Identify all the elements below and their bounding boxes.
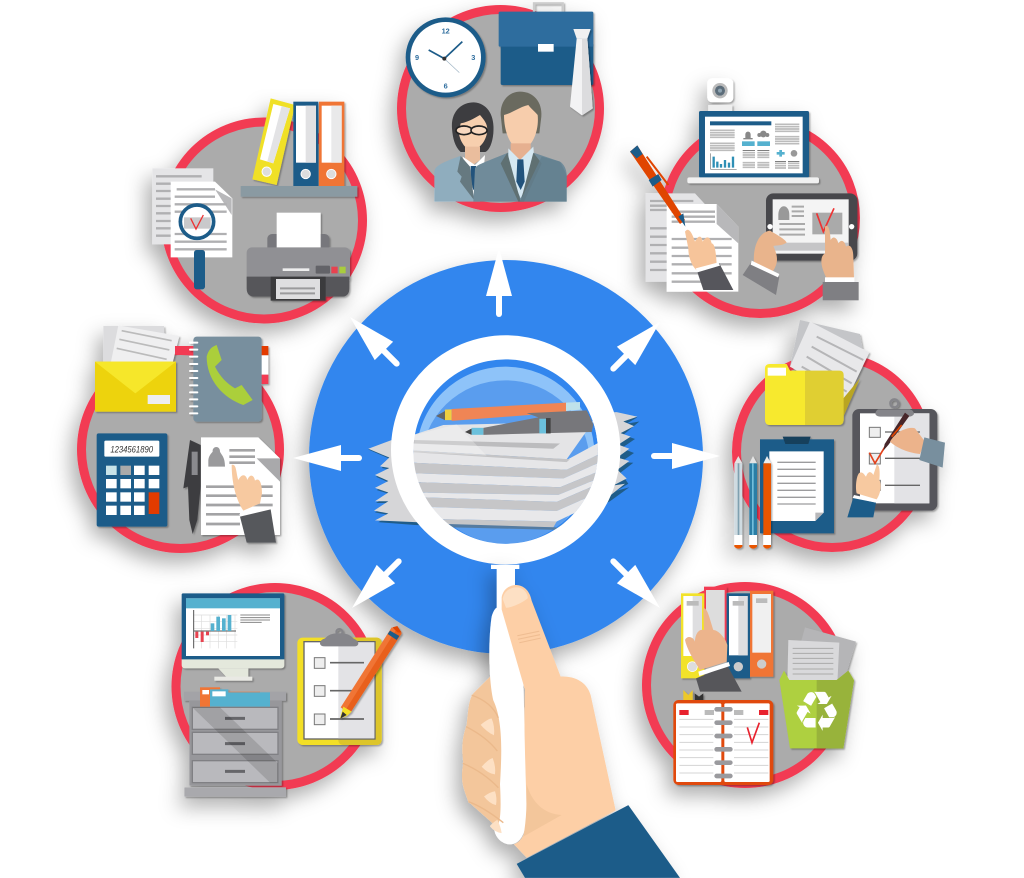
arrow: lower right <box>604 552 669 617</box>
arrow: lower left <box>343 552 408 617</box>
icon: black pen <box>183 440 201 534</box>
icon: yellow clipboard checklist <box>297 629 382 745</box>
icon: orange pen in lens <box>436 402 580 421</box>
icon: pink strap <box>175 346 195 355</box>
icon: three pencils <box>734 456 771 549</box>
lens interior <box>413 359 607 544</box>
icon: briefcase <box>499 3 593 85</box>
icon: filing cabinet <box>184 687 286 797</box>
icon: hand on document <box>685 230 733 290</box>
arrow: upper right <box>604 313 669 378</box>
finger creases <box>463 695 503 823</box>
panel: correspondence and contacts <box>82 325 280 548</box>
arrows radiating from centre <box>293 248 720 617</box>
icon: laptop <box>687 111 819 183</box>
icon: thumbnail <box>503 587 528 608</box>
icon: calculator: 1234561890 <box>110 444 153 454</box>
icon: magnifier handle <box>489 565 527 844</box>
icon: documents with magnifier <box>152 168 232 289</box>
arrow: top <box>486 248 512 314</box>
arrow: right <box>654 443 720 469</box>
icon: thumb and palm <box>502 585 616 858</box>
icon: hand picking binder <box>685 608 742 692</box>
icon: letters in envelope <box>95 325 179 412</box>
icon: printer <box>247 213 350 301</box>
panel: filing and printing <box>152 98 362 319</box>
lens rim <box>391 335 620 564</box>
icon: webcam <box>707 78 733 111</box>
icon: pointing hand <box>847 465 881 517</box>
icon: necktie <box>570 29 593 115</box>
icon: tablet <box>766 193 857 261</box>
icon: phone book <box>190 337 268 422</box>
panel: folders and clipboards <box>734 320 945 549</box>
icon: suit sleeve <box>517 805 680 878</box>
icon: binders on shelf <box>241 98 357 197</box>
magnifying glass with paper stack <box>368 335 639 564</box>
icon: wall clock: 6 <box>444 81 448 90</box>
paper layers <box>413 422 607 530</box>
icon: fingernails <box>481 719 502 833</box>
panel: office desk and checklist <box>176 588 402 797</box>
paper stack edges outside lens <box>368 412 639 530</box>
icon: calculator <box>97 433 167 527</box>
icon: desktop monitor with chart <box>182 593 284 681</box>
blue central disc <box>309 260 703 654</box>
panel: online review <box>630 78 859 314</box>
icon: wall clock <box>406 17 486 97</box>
arrow: left <box>293 445 359 471</box>
icon: recycling bin: ♻ <box>792 680 841 744</box>
icon: fingers <box>462 674 506 835</box>
icon: grey pen in lens <box>465 410 593 435</box>
panel: staff and work hours <box>402 3 600 208</box>
icon: wall clock: 9 <box>415 53 419 62</box>
icon: wall clock: 3 <box>471 53 475 62</box>
icon: man <box>473 92 567 202</box>
icon: woman <box>434 102 494 202</box>
icon: hands on tablet <box>743 226 859 300</box>
icon: blue clipboard <box>760 437 834 533</box>
icon: row of binders <box>681 587 773 678</box>
icon: wall clock: 12 <box>442 26 450 35</box>
icon: resume with pointing hand <box>201 437 280 543</box>
icon: recycling bin <box>779 627 856 748</box>
icon: pen <box>630 145 738 292</box>
panel: binders and recycling <box>646 586 856 785</box>
arrow: upper left <box>341 308 406 373</box>
icon: orange pencil <box>340 626 402 719</box>
hand holding magnifier <box>462 565 680 878</box>
icon: checklist clipboard with hands <box>852 399 937 511</box>
icon: folder with papers <box>765 320 869 425</box>
icon: open planner <box>673 690 773 785</box>
icon: orange pen in hand <box>883 413 945 468</box>
